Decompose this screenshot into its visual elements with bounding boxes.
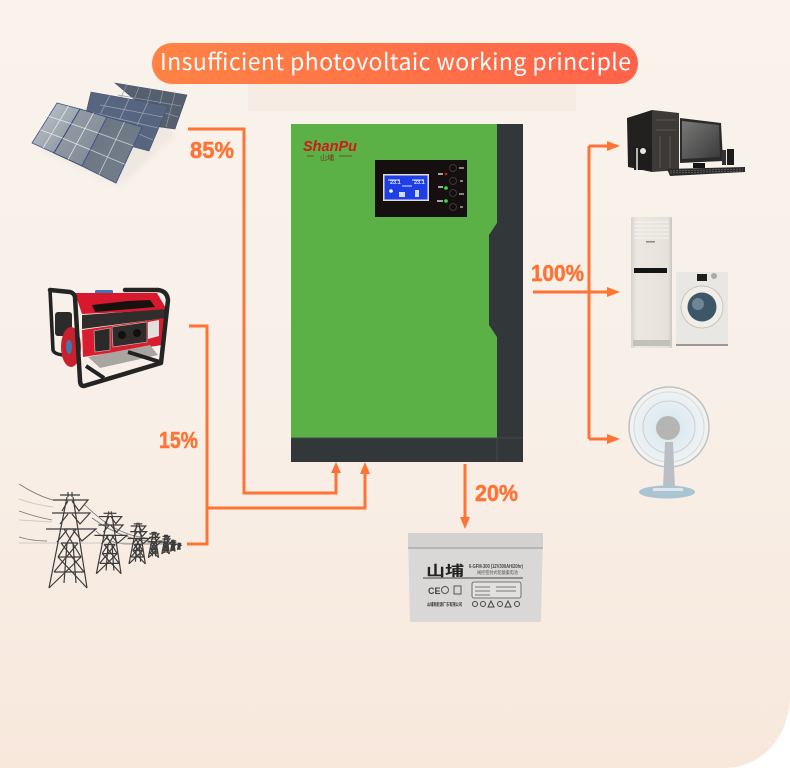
icon: battery (408, 533, 543, 622)
arrow: battery 20% output (460, 464, 470, 529)
brand logo (303, 138, 357, 163)
arrow: generator and grid 15% input (187, 326, 370, 544)
title pill: Insufficient photovoltaic working principle (160, 43, 631, 77)
icon: desktop computer (627, 110, 745, 176)
icon: power transmission towers (19, 484, 181, 588)
icon: air conditioner (631, 217, 672, 348)
icon: battery: 6-GFM-300 (12V300AH/20hr) (469, 564, 523, 570)
inverter dark casing (291, 124, 523, 462)
icon: washing machine (676, 272, 728, 346)
label: 20%: 20% (475, 480, 518, 506)
icon: solar panels (32, 83, 187, 186)
icon: battery: 山埔 (426, 561, 464, 581)
control panel: 23.1 (390, 180, 401, 186)
brand logo: ShanPu (303, 138, 357, 155)
icon: electric fan (629, 387, 709, 498)
label: 100%: 100% (531, 260, 584, 286)
arrow: solar 85% input (188, 129, 341, 493)
brand logo: 山埔 (320, 153, 334, 163)
inverter green front (291, 124, 497, 438)
control panel: 23.1 (414, 180, 425, 186)
icon: battery: CE (428, 586, 441, 596)
icon: battery: 阀控密封式铅酸蓄电池 (477, 569, 518, 576)
icon: battery: 山埔新能源广东有限公司 (427, 601, 462, 608)
inverter (291, 124, 523, 462)
arrows: load 100% output (533, 141, 620, 444)
label: 15%: 15% (159, 427, 198, 453)
label: 85%: 85% (190, 137, 234, 163)
icon: petrol generator (50, 290, 168, 386)
control panel (375, 160, 467, 217)
